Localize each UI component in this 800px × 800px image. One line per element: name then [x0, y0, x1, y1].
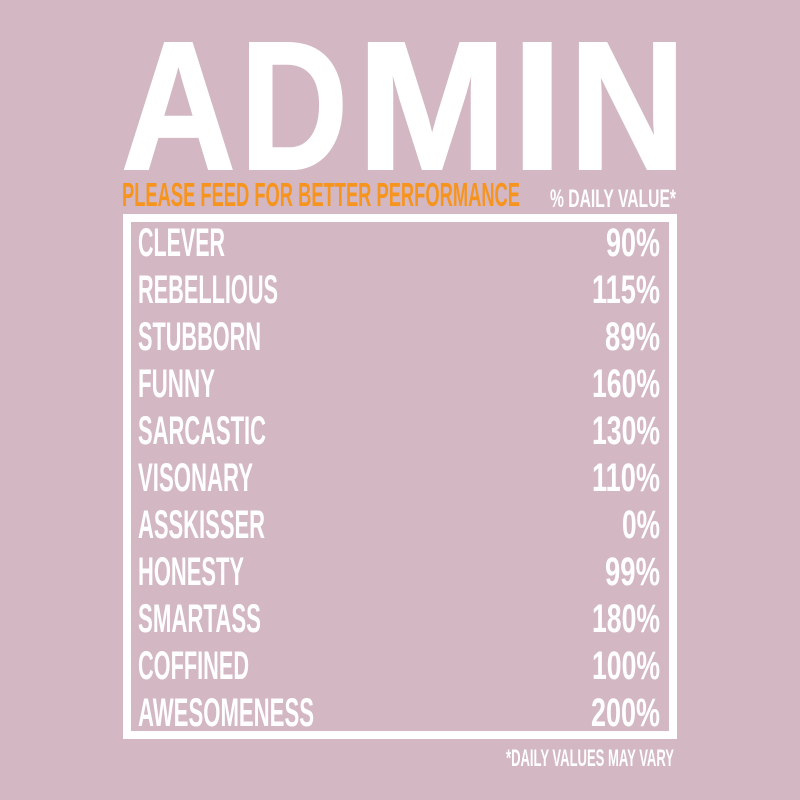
- row: clever: 90%: [606, 221, 660, 265]
- row: awesomeness: 200%: [591, 691, 660, 735]
- row: rebellious: [138, 268, 660, 312]
- title: I: [512, 3, 563, 208]
- title: D: [240, 3, 348, 208]
- title: A: [121, 3, 236, 208]
- row: honesty: 99%: [605, 550, 660, 594]
- row: rebellious: REBELLIOUS: [138, 268, 278, 312]
- row: awesomeness: [138, 691, 660, 735]
- row: coffined: [138, 644, 660, 688]
- row: coffined: 100%: [592, 644, 660, 688]
- row: sarcastic: 130%: [592, 409, 660, 453]
- row: sarcastic: [138, 409, 660, 453]
- row: coffined: COFFINED: [138, 644, 249, 688]
- row: sarcastic: SARCASTIC: [138, 409, 266, 453]
- row: stubborn: [138, 315, 660, 359]
- row: stubborn: STUBBORN: [138, 315, 261, 359]
- row: visonary: 110%: [592, 456, 660, 500]
- row: honesty: HONESTY: [138, 550, 244, 594]
- row: funny: FUNNY: [138, 362, 215, 406]
- row: smartass: 180%: [592, 597, 660, 641]
- row: clever: [138, 221, 660, 265]
- row: clever: CLEVER: [138, 221, 225, 265]
- row: rebellious: 115%: [592, 268, 660, 312]
- panel: facts box: [127, 218, 673, 735]
- column heading: daily value: % DAILY VALUE*: [550, 185, 676, 213]
- row: funny: [138, 362, 660, 406]
- row: visonary: [138, 456, 660, 500]
- row: awesomeness: AWESOMENESS: [138, 691, 314, 735]
- row: honesty: [138, 550, 660, 594]
- title: [121, 3, 686, 208]
- title: M: [357, 3, 507, 208]
- row: funny: 160%: [592, 362, 660, 406]
- row: asskisser: 0%: [622, 503, 660, 547]
- row: smartass: [138, 597, 660, 641]
- row: asskisser: [138, 503, 660, 547]
- row: smartass: SMARTASS: [138, 597, 261, 641]
- row: asskisser: ASSKISSER: [138, 503, 265, 547]
- row: visonary: VISONARY: [138, 456, 253, 500]
- row: stubborn: 89%: [605, 315, 660, 359]
- rows list: [138, 221, 660, 735]
